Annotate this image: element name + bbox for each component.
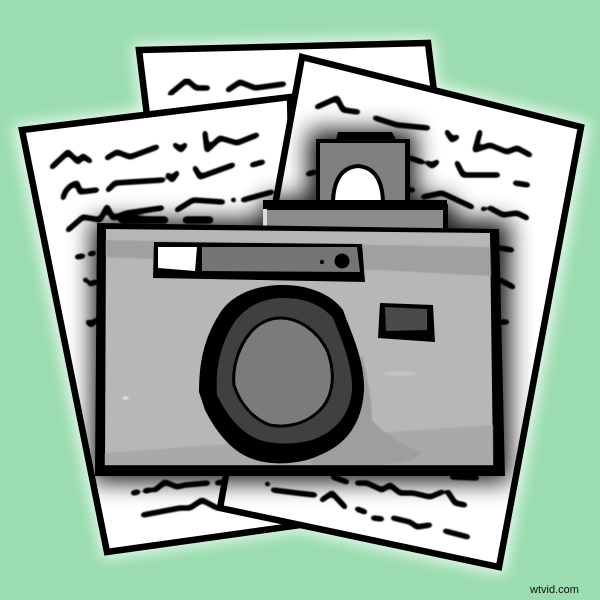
lens shadow <box>310 355 422 465</box>
camera body <box>95 223 505 476</box>
viewfinder housing <box>316 132 410 203</box>
top display bar <box>153 242 365 282</box>
lens glass <box>234 318 332 426</box>
lens <box>199 285 364 463</box>
back paper <box>139 43 440 140</box>
back paper writing <box>170 80 284 94</box>
left paper writing <box>52 133 272 515</box>
side button <box>378 303 435 342</box>
right paper writing <box>267 98 530 537</box>
top plate <box>263 200 448 228</box>
camera <box>95 132 505 476</box>
viewfinder window <box>333 166 383 202</box>
right paper <box>220 57 581 567</box>
watermark: wtvid.com <box>529 584 579 596</box>
camera shadow on papers <box>92 130 510 482</box>
left paper <box>22 97 300 552</box>
indicator dots <box>334 254 350 268</box>
highlight marks <box>123 373 415 399</box>
